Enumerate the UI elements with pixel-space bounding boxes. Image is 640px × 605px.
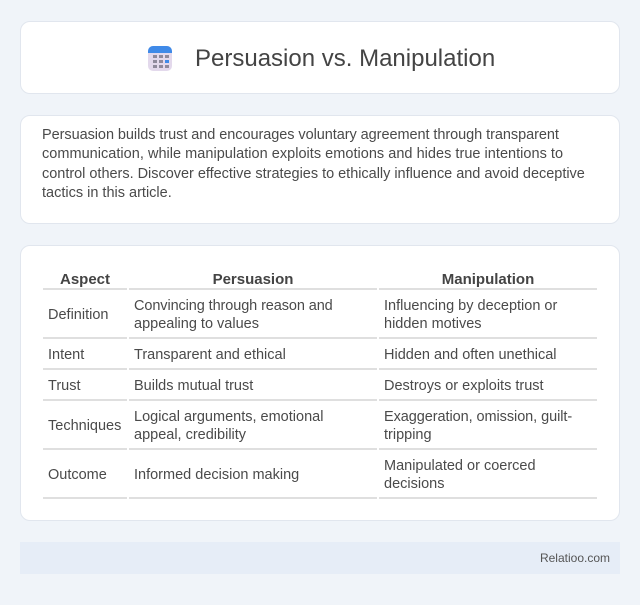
- description text: Persuasion builds trust and encourages voluntary agreement through transparent: [42, 127, 559, 143]
- row: Intent: Hidden and often unethical: [384, 347, 557, 363]
- description text: [42, 127, 585, 201]
- footer bar: [20, 542, 620, 574]
- description text: communication, while manipulation exploits emotions and hides true intentions to: [42, 146, 563, 162]
- row: Techniques: tripping: [384, 427, 432, 443]
- row: Outcome: Informed decision making: [134, 467, 299, 483]
- description text: tactics in this article.: [42, 185, 172, 201]
- row: Intent: Intent: [48, 347, 84, 363]
- row: Trust: Builds mutual trust: [134, 378, 253, 394]
- row: Outcome: [48, 458, 536, 492]
- row: Definition: Convincing through reason and: [134, 298, 333, 314]
- title card: [20, 21, 620, 94]
- footer brand text: Relatioo.com: [540, 551, 610, 565]
- row: Techniques: appeal, credibility: [134, 427, 246, 443]
- row: Definition: Influencing by deception or: [384, 298, 557, 314]
- row: Outcome: decisions: [384, 476, 444, 492]
- row: Intent: [48, 347, 557, 363]
- table header: Manipulation: Manipulation: [442, 271, 534, 288]
- row: Definition: [48, 298, 558, 332]
- row: Techniques: Logical arguments, emotional: [134, 409, 323, 425]
- row: Intent: Transparent and ethical: [134, 347, 286, 363]
- title: Persuasion vs. Manipulation: [195, 45, 495, 72]
- row: Techniques: Exaggeration, omission, guilt-: [384, 409, 572, 425]
- table header: Persuasion: Persuasion: [213, 271, 293, 288]
- row: Trust: Trust: [48, 378, 80, 394]
- row: Definition: hidden motives: [384, 316, 482, 332]
- row: Techniques: [48, 409, 572, 443]
- row: Trust: [48, 378, 544, 394]
- icon: calendar: [148, 46, 172, 71]
- table header: Aspect: Aspect: [60, 271, 110, 288]
- row: Definition: appealing to values: [134, 316, 259, 332]
- row: Outcome: Outcome: [48, 467, 107, 483]
- comparison table card: [20, 245, 620, 521]
- row: Outcome: Manipulated or coerced: [384, 458, 536, 474]
- row: Definition: Definition: [48, 307, 108, 323]
- description text: control others. Discover effective strategies to ethically influence and avoid deceptive: [42, 166, 585, 182]
- description card: [20, 115, 620, 224]
- row: Techniques: Techniques: [48, 418, 121, 434]
- row: Trust: Destroys or exploits trust: [384, 378, 544, 394]
